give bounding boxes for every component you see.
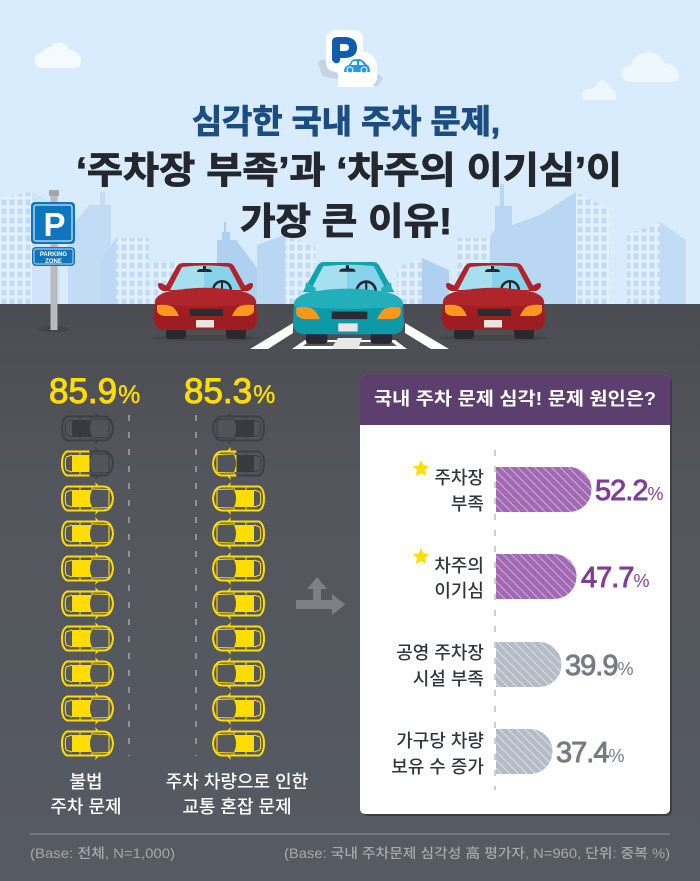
- sky background: [0, 0, 700, 304]
- icon: parking and car: [318, 30, 383, 87]
- title line 3: 가장 큰 이유!: [240, 201, 452, 242]
- footer rule: [30, 833, 670, 835]
- car: red left: [154, 263, 257, 339]
- title line 1: 심각한 국내 주차 문제,: [192, 103, 500, 140]
- bar: 52.2%: [496, 467, 592, 512]
- car: teal center: [293, 262, 404, 344]
- caption: 불법 주차 문제: 불법: [69, 772, 103, 792]
- cityscape: [0, 184, 686, 304]
- label: 주차장 부족: 부족: [451, 494, 484, 514]
- panel heading: 국내 주차 문제 심각! 문제 원인은?: [374, 389, 656, 409]
- parking sign: P: [43, 206, 66, 243]
- bar: 39.9%: [496, 642, 562, 687]
- footnote right: (Base: 국내 주차문제 심각성 高 평가자, N=960, 단위: 중복 %): [284, 845, 670, 861]
- right dashed divider: [195, 415, 197, 756]
- title line 2: ‘주차장 부족’과 ‘차주의 이기심’이: [76, 150, 622, 191]
- car pictogram column: 불법 주차: [62, 412, 113, 760]
- star icon 1: [413, 460, 429, 476]
- value: 52.2%: 52.2%: [595, 475, 663, 507]
- parking sign: PARKING: [40, 252, 67, 258]
- label: 공영 주차장 시설 부족: 시설 부족: [413, 669, 484, 689]
- label: 가구당 차량 보유 수 증가: 가구당 차량: [396, 731, 484, 751]
- bar: 47.7%: [496, 554, 576, 599]
- parking sign: [31, 190, 75, 332]
- car shadows: [152, 335, 548, 341]
- car: red right: [442, 263, 545, 339]
- star icon 2: [413, 548, 429, 564]
- cloud left: [35, 42, 81, 68]
- road: [0, 304, 700, 881]
- caption: 불법 주차 문제: 주차 문제: [50, 797, 122, 817]
- car pictogram column: 교통 혼잡: [213, 412, 264, 760]
- bar: 37.4%: [496, 729, 552, 774]
- label: 차주의 이기심: 차주의: [434, 556, 484, 576]
- caption: 교통 혼잡 문제: 주차 차량으로 인한: [166, 772, 308, 792]
- label: 차주의 이기심: 이기심: [434, 581, 484, 601]
- value: 47.7%: 47.7%: [581, 562, 649, 594]
- left dashed divider: [128, 415, 130, 756]
- footnote left: (Base: 전체, N=1,000): [30, 846, 175, 861]
- parking sign: ZONE: [45, 259, 62, 265]
- cloud right: [622, 52, 679, 82]
- label: 주차장 부족: 주차장: [434, 468, 484, 488]
- value: 37.4%: 37.4%: [556, 737, 624, 769]
- label: 공영 주차장 시설 부족: 공영 주차장: [396, 643, 484, 663]
- stat: 85.9%: 85.9%: [49, 372, 140, 411]
- label: 가구당 차량 보유 수 증가: 보유 수 증가: [391, 757, 484, 777]
- parking space markings: [250, 323, 449, 349]
- caption: 교통 혼잡 문제: 교통 혼잡 문제: [182, 797, 292, 817]
- cloud small: [582, 80, 616, 100]
- value: 39.9%: 39.9%: [565, 650, 633, 682]
- panel: causes: [360, 375, 672, 816]
- arrow: [296, 577, 345, 615]
- stat: 85.3%: 85.3%: [184, 372, 275, 411]
